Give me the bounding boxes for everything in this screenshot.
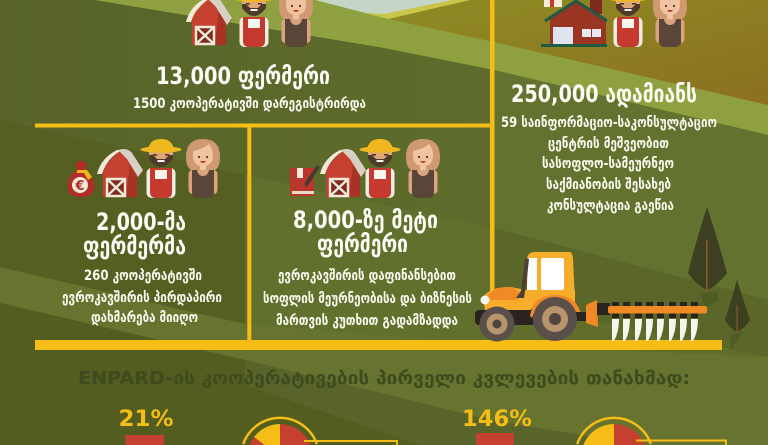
text: direct EU aid: დახმარება მიიღო bbox=[91, 310, 198, 326]
text: training bbox=[263, 268, 472, 329]
panel: 8,000 farmers bbox=[263, 139, 472, 329]
bar bbox=[476, 433, 514, 445]
number: 21% bbox=[118, 407, 174, 432]
icon: farmer bbox=[608, 0, 648, 47]
chart: pie 1 bbox=[243, 418, 397, 445]
text: consultation centres: 59 საინფორმაციო-საკონსულტაციო bbox=[501, 115, 717, 131]
icon: tall tree bbox=[688, 207, 727, 308]
heading: farmers: ფერმერმა bbox=[83, 232, 186, 260]
icon: money bag bbox=[68, 161, 94, 197]
heading: 13,000: 13,000 ფერმერი bbox=[156, 62, 330, 90]
text: direct EU aid bbox=[62, 268, 222, 326]
text: consultation centres: სასოფლო-სამეურნეო bbox=[542, 156, 674, 172]
text: direct EU aid: ევროკავშირის პირდაპირი bbox=[62, 290, 222, 306]
text: consultation centres: საქმიანობის შესახებ bbox=[546, 177, 671, 193]
icon: woman farmer bbox=[279, 0, 313, 47]
icon: farmer bbox=[140, 139, 182, 198]
icon: farmer bbox=[234, 0, 274, 47]
icon: woman farmer bbox=[406, 139, 440, 198]
heading: 8,000: 8,000-ზე მეტი bbox=[293, 206, 438, 234]
panel: 13,000 farmers bbox=[133, 0, 366, 112]
chart: pie 2 bbox=[577, 418, 726, 445]
heading: survey title: ENPARD-ის კოოპერატივების პირველი კვლევების თანახმად: bbox=[78, 369, 690, 389]
stat: 146% bbox=[462, 407, 532, 445]
text: registered: 1500 კოოპერატივში დარეგისტრირდა bbox=[133, 96, 366, 112]
icon: money bag: € bbox=[74, 179, 85, 194]
text: training: სოფლის მეურნეობისა და ბიზნესის bbox=[263, 291, 472, 307]
icon: woman farmer bbox=[186, 139, 220, 198]
panel: 250,000 people bbox=[501, 0, 717, 214]
text: training: მართვის კუთხით გადამზადდა bbox=[276, 313, 458, 329]
yellow frame lines bbox=[35, 0, 722, 350]
text: training: ევროკავშირის დაფინანსებით bbox=[278, 268, 456, 284]
text: consultation centres bbox=[501, 115, 717, 214]
heading: 2,000: 2,000-მა bbox=[96, 208, 186, 236]
icon: woman farmer bbox=[653, 0, 687, 47]
stat: 21% bbox=[118, 407, 174, 445]
bar bbox=[126, 435, 164, 445]
icon: farmer bbox=[360, 139, 400, 198]
panel: 2,000 farmers bbox=[62, 139, 222, 326]
icon: small tree bbox=[725, 280, 750, 350]
icon: barn bbox=[97, 149, 143, 197]
icon: tractor with plough bbox=[475, 252, 707, 342]
number: 146% bbox=[462, 407, 532, 432]
text: direct EU aid: 260 კოოპერატივში bbox=[84, 268, 202, 284]
icon: consultation house bbox=[541, 0, 607, 47]
icon: barn bbox=[186, 0, 232, 45]
text: consultation centres: კონსულტაცია გაეწია bbox=[547, 198, 674, 214]
heading: 250,000: 250,000 ადამიანს bbox=[511, 80, 697, 108]
heading: farmers: ფერმერი bbox=[317, 230, 408, 258]
icon: barn bbox=[320, 149, 366, 197]
text: consultation centres: ცენტრის მეშვეობით bbox=[548, 136, 669, 152]
icon: book and pen bbox=[290, 165, 320, 196]
